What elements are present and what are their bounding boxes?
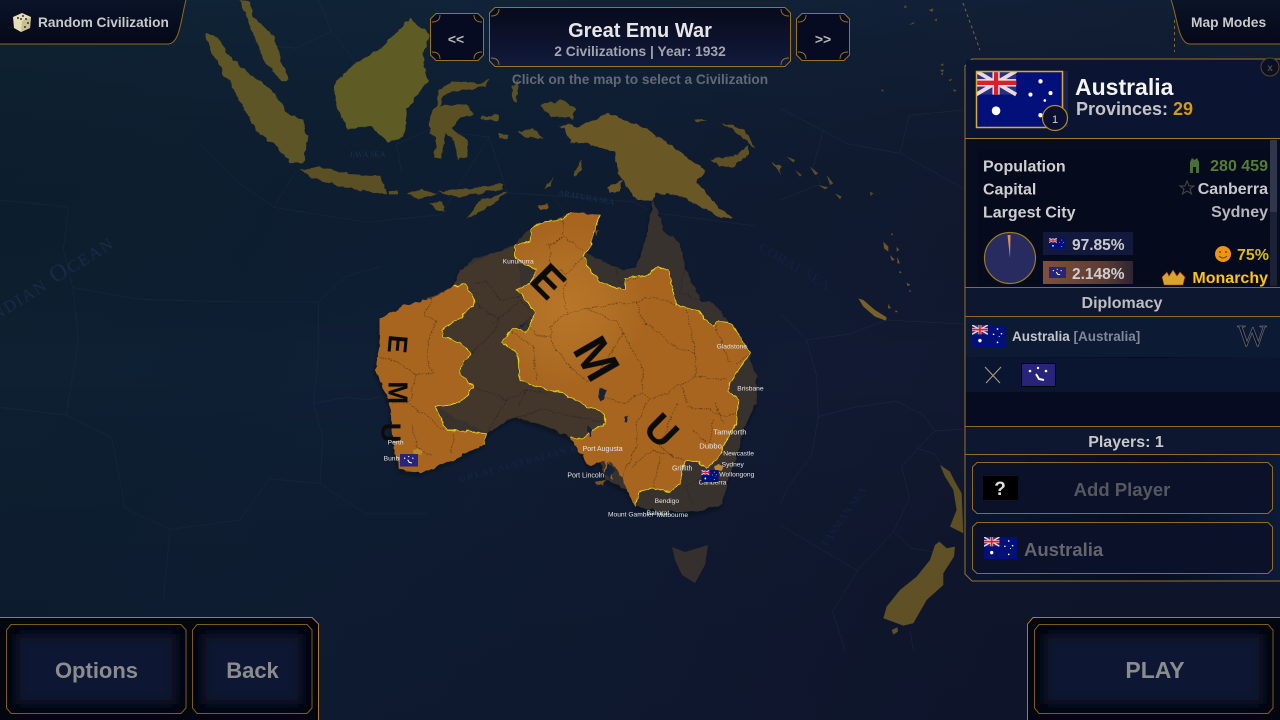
city labels: Griffith [672, 466, 693, 473]
bottom right panel [1027, 617, 1280, 720]
land: New Guinea [557, 113, 733, 218]
civilization name: Australia [1075, 74, 1174, 100]
city labels: Sydney [722, 461, 745, 468]
sea labels [0, 150, 869, 550]
stat values: 280 459 [1210, 158, 1268, 175]
button: next: >> [815, 31, 831, 47]
diplomacy header [965, 288, 1280, 316]
icon: dice [13, 13, 31, 32]
map: Australia land [375, 200, 757, 512]
letter M: M [562, 328, 629, 390]
letter E: E [521, 255, 575, 309]
city labels: Bunbury [384, 456, 409, 463]
land: Maluku [481, 78, 581, 189]
subtitle: 2 Civilizations | Year: 1932 [554, 44, 726, 59]
stat values: Canberra [1198, 181, 1268, 198]
label: Random Civilization [38, 15, 169, 30]
icon: capital star [1180, 181, 1194, 194]
city labels: Newcastle [723, 451, 754, 458]
share bar: Australia: 97.85% [1072, 237, 1125, 254]
city labels: Brisbane [737, 386, 764, 393]
land shadow [374, 203, 756, 516]
label: Map Modes [1191, 15, 1266, 30]
letter E: E [382, 334, 414, 355]
letter U: U [376, 423, 407, 443]
capital marker: Emu [400, 449, 423, 467]
city labels: Kununurra [503, 259, 534, 266]
share bar: Emus: 2.148% [1072, 266, 1125, 283]
button: add player [972, 462, 1272, 514]
button: Australia player: Australia [1024, 539, 1104, 560]
stat labels: Capital [983, 182, 1036, 198]
button: play [1034, 624, 1273, 714]
button: previous: << [448, 31, 464, 47]
provinces: Provinces: 29 [1076, 99, 1193, 119]
stat labels: Population [983, 158, 1066, 176]
diplomacy header: Diplomacy [1082, 295, 1163, 312]
title plate [490, 8, 790, 66]
map: Australia labels [376, 255, 764, 519]
label: Coral Sea: CORAL SEA [755, 240, 833, 294]
icon: population [1190, 158, 1199, 173]
Tasmania [672, 545, 708, 583]
map: Indonesia and New Guinea [204, 0, 781, 218]
land: Java [300, 167, 387, 194]
button: back [192, 624, 312, 714]
stat values: Sydney [1211, 204, 1268, 221]
stability: 75% [1237, 247, 1269, 264]
lakes [520, 322, 628, 479]
map: Pacific islands and New Zealand [858, 233, 963, 635]
land: Lesser Sunda [389, 184, 507, 218]
button: options [6, 624, 186, 714]
city labels: Gladstone [717, 344, 747, 351]
label: Java Sea: JAVA SEA [349, 150, 386, 159]
city labels: Perth [388, 440, 404, 447]
land: Malay peninsula [239, 0, 290, 81]
flag: Emus [1021, 363, 1056, 387]
land: New Caledonia [858, 298, 887, 321]
close button [1261, 58, 1279, 76]
label: Arafura Sea: ARAFURA SEA [558, 188, 615, 207]
diplomacy row: Australia: Australia [Australia] [1012, 329, 1140, 344]
city labels: Ballarat [647, 510, 669, 517]
population pie chart [984, 232, 1036, 284]
button: add player: Add Player [1074, 479, 1170, 500]
city labels: Port Augusta [583, 446, 623, 453]
badge: 1 [1052, 114, 1058, 126]
war row [966, 358, 1280, 392]
label: Great Australian Bight: GREAT AUSTRALIAN BIGHT [458, 435, 606, 484]
button: options: Options [55, 658, 138, 683]
top left tab: Random Civilization [0, 0, 186, 44]
land: New Zealand south island [883, 542, 955, 626]
share bar: Australia [1043, 232, 1133, 255]
letter M: M [382, 381, 413, 404]
diplomacy row: Australia [966, 317, 1280, 357]
government: Monarchy [1192, 270, 1268, 287]
button: add player: ? [994, 479, 1006, 500]
land: Vanuatu [883, 233, 911, 312]
hint text: Click on the map to select a Civilization [512, 72, 768, 87]
label: Tasman Sea: TASMAN SEA [819, 485, 869, 550]
stat labels: Largest City [983, 204, 1076, 222]
heading: Great Emu War [568, 20, 712, 42]
land: New Zealand north island [940, 465, 963, 533]
city labels: Canberra [699, 480, 727, 487]
land: Sumatra [204, 33, 307, 163]
stat values [1198, 158, 1268, 221]
button: next [796, 14, 850, 60]
letter U: U [635, 405, 687, 457]
players header [965, 426, 1280, 454]
stat labels [983, 158, 1076, 222]
city labels: Dubbo [699, 442, 722, 451]
flag: Australia [976, 71, 1068, 130]
sea region borders [0, 0, 963, 650]
land: Sulawesi [429, 78, 489, 159]
city labels: Tamworth [713, 428, 746, 437]
button: back: Back [226, 658, 280, 683]
players header: Players: 1 [1088, 434, 1164, 451]
button: previous [430, 14, 484, 60]
city labels: Bendigo [655, 498, 679, 505]
top right tab: Map Modes [1171, 0, 1280, 44]
share bar: Emus [1043, 261, 1133, 284]
scrollbar [1270, 140, 1277, 286]
province borders [380, 220, 750, 507]
orange region: Eastern Australia [502, 212, 750, 507]
close button: x [1267, 63, 1273, 74]
yellow border lines [435, 212, 750, 507]
button: play: PLAY [1125, 657, 1185, 683]
small islands north east [787, 5, 957, 199]
bottom left panel [0, 617, 318, 720]
button: Australia player [972, 522, 1272, 574]
capital marker: Australia [701, 464, 723, 482]
dark neutral land [375, 200, 757, 512]
icon: wikipedia: W [1237, 318, 1267, 353]
EMU curved label east [521, 255, 687, 457]
EMU label west [376, 334, 414, 443]
city labels: Port Lincoln [567, 472, 604, 479]
city labels: Wollongong [719, 472, 755, 479]
land: Borneo [334, 19, 430, 143]
icon: crossed swords [985, 367, 1001, 383]
right panel: civilization details [965, 58, 1280, 581]
orange region: Western Australia [375, 283, 487, 473]
territorial dashed lines [963, 3, 1174, 52]
stability [1215, 246, 1269, 264]
city labels: Melbourne [657, 512, 688, 519]
city labels: Mount Gambier [608, 511, 655, 518]
city labels [384, 259, 764, 519]
